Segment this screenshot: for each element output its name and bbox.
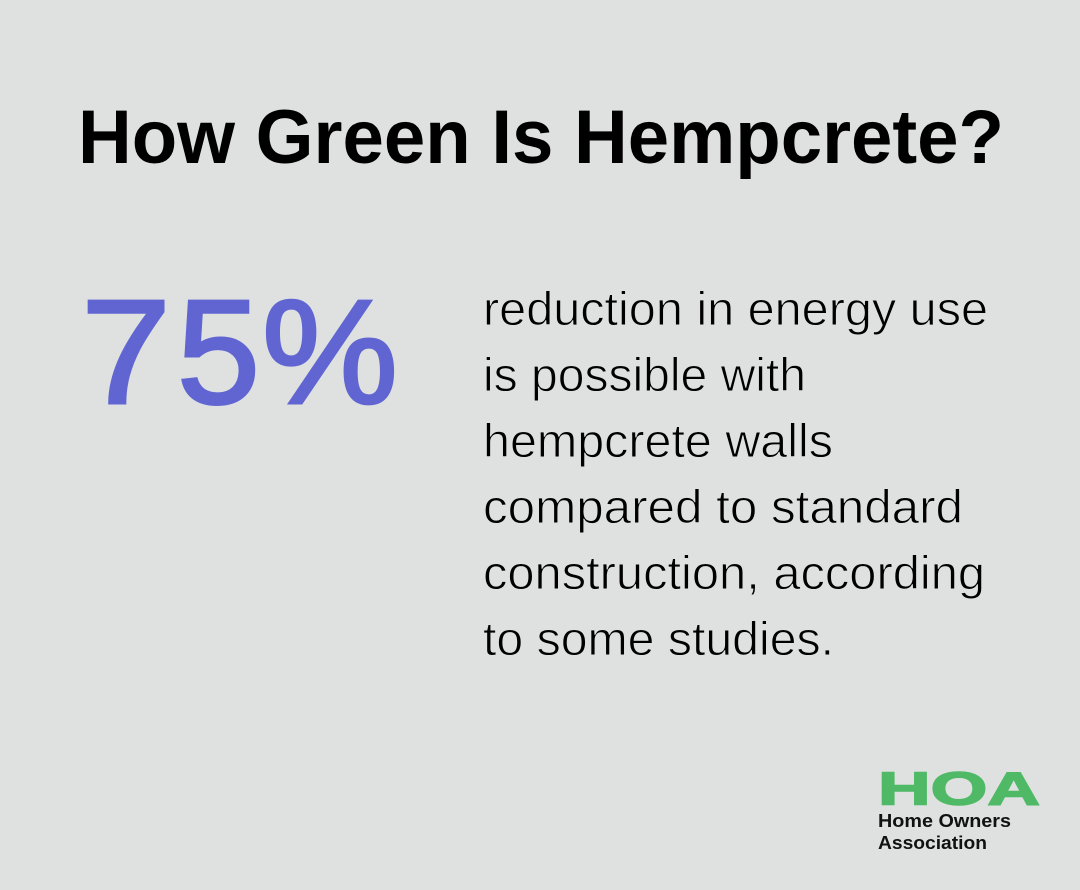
description text block bbox=[483, 282, 988, 665]
description text block: construction, according bbox=[483, 546, 985, 599]
description text block: is possible with bbox=[483, 348, 806, 401]
description text block: to some studies. bbox=[483, 612, 834, 665]
title: How Green Is Hempcrete? bbox=[78, 95, 1004, 180]
logo: Home Owners Association: Home Owners bbox=[878, 811, 1011, 831]
big statistic: 75%: 7 bbox=[81, 270, 171, 435]
logo: Home Owners Association bbox=[878, 762, 1040, 853]
logo: Home Owners Association: Association bbox=[878, 833, 987, 853]
description text block: hempcrete walls bbox=[483, 414, 833, 467]
description text block: compared to standard bbox=[483, 480, 963, 533]
description text block: reduction in energy use bbox=[483, 282, 988, 335]
big statistic: 75% bbox=[81, 270, 398, 435]
logo: Home Owners Association: HOA bbox=[878, 762, 1040, 814]
big statistic: 75%: 5 bbox=[177, 270, 260, 435]
big statistic: 75%: % bbox=[262, 270, 398, 435]
